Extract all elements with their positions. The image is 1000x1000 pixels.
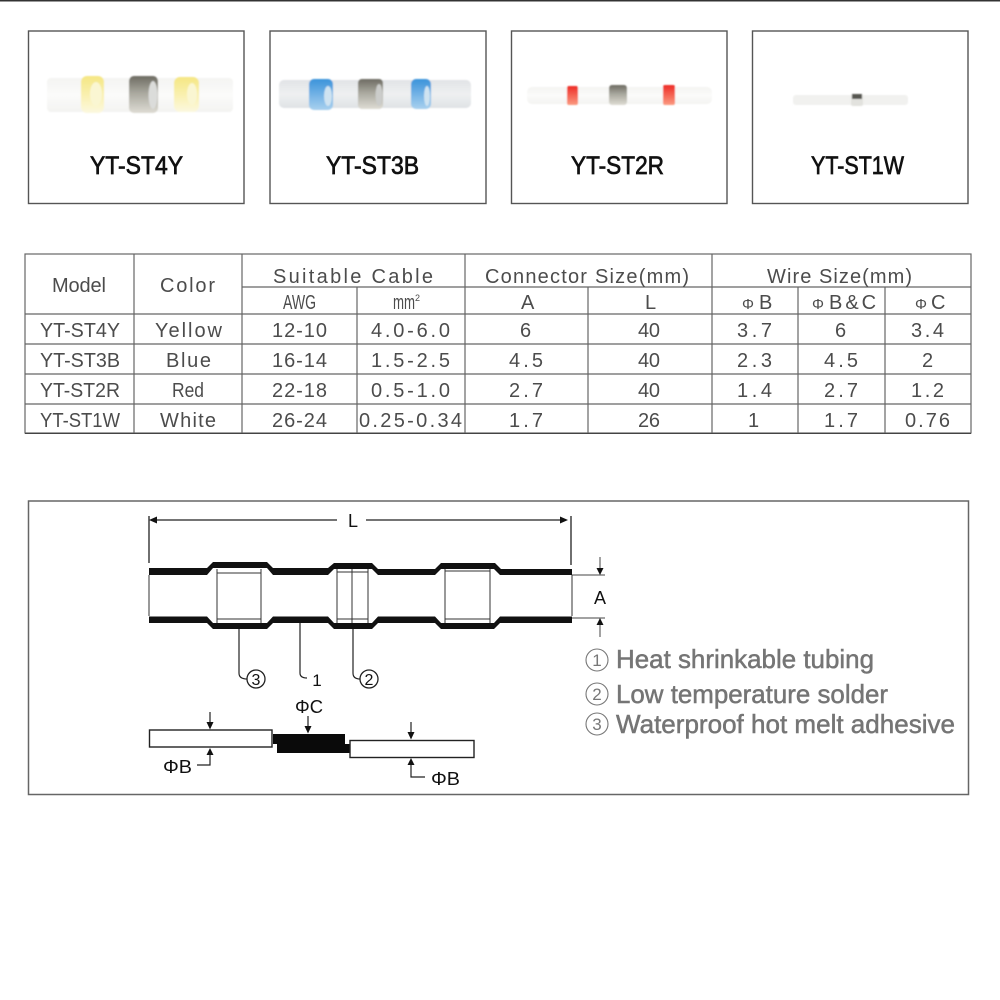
dimension A [572,557,606,637]
dimension A: A [594,588,606,608]
table row: YT-ST2R: 1.2 [911,380,944,402]
table row: YT-ST3B: 4.5 [509,350,543,372]
legend item 1: Heat shrinkable tubing [616,644,874,674]
table header: 2 [415,293,420,303]
legend item 3: 3 [592,715,602,734]
panel: connector diagram [28,501,968,794]
table row: YT-ST1W: 1.7 [824,410,858,432]
tube cross-section [149,562,572,629]
table row: YT-ST3B: 4.5 [824,350,858,372]
table row: YT-ST2R: 22-18 [272,380,327,402]
label: phi B right: ΦB [431,769,460,789]
specification table [25,254,971,434]
table row: YT-ST4Y: Yellow [155,320,223,342]
table row: YT-ST1W: 26 [638,410,660,432]
table row: YT-ST1W: 0.25-0.34 [359,410,462,432]
table row: YT-ST3B: 16-14 [272,350,327,372]
table row: YT-ST2R: 2.7 [509,380,543,402]
table row: YT-ST2R: YT-ST2R [40,380,120,402]
table header: ΦC [915,292,945,314]
photo: white connector [793,94,908,106]
table row: YT-ST3B [40,350,933,372]
panel: YT-ST3B product [270,31,486,204]
table header: A [521,292,535,314]
table header: ΦB [742,292,772,314]
table header: L [645,292,656,314]
table row: YT-ST3B: 40 [638,350,660,372]
callout 3 [239,629,265,689]
table row: YT-ST4Y: 6 [835,320,846,342]
table header: Suitable Cable [273,266,433,288]
legend item 1: 1 [592,651,602,670]
table row: YT-ST4Y: 4.0-6.0 [371,320,450,342]
table row: YT-ST4Y: 3.7 [737,320,772,342]
table row: YT-ST1W: White [160,410,216,432]
table row: YT-ST3B: 2.3 [737,350,772,372]
table row: YT-ST2R: 1.4 [737,380,772,402]
label: YT-ST2R: YT-ST2R [571,152,664,180]
callout 1: 1 [312,671,322,690]
legend item 2: Low temperature solder [616,679,888,709]
table row: YT-ST3B: 1.5-2.5 [371,350,450,372]
label: phi B left: ΦB [163,757,192,777]
table header: Model [52,275,106,297]
table row: YT-ST1W: 1 [748,410,759,432]
table row: YT-ST1W: YT-ST1W [40,410,120,432]
panel: YT-ST2R product [512,31,727,204]
table row: YT-ST1W: 1.7 [509,410,543,432]
table row: YT-ST1W: 26-24 [272,410,327,432]
wire diagram [150,697,474,789]
callout 1 [300,623,322,690]
table row: YT-ST4Y: 40 [638,320,660,342]
table row: YT-ST2R: Red [172,380,204,402]
photo: blue connector [279,79,471,110]
table row: YT-ST3B: Blue [166,350,211,372]
table row: YT-ST2R: 0.5-1.0 [371,380,450,402]
table row: YT-ST4Y: 12-10 [272,320,327,342]
table row: YT-ST4Y: YT-ST4Y [40,320,120,342]
table row: YT-ST2R: 2.7 [824,380,858,402]
label: phi C: ΦC [295,697,323,717]
table header: AWG [283,292,316,314]
table row: YT-ST4Y: 3.4 [911,320,944,342]
table row: YT-ST2R [40,380,944,402]
table row: YT-ST1W: 0.76 [905,410,950,432]
photo: red connector [527,85,712,105]
dimension L [149,511,571,565]
table row: YT-ST2R: 40 [638,380,660,402]
table header: Connector Size(mm) [485,266,689,288]
legend item 3: Waterproof hot melt adhesive [616,709,955,739]
table row: YT-ST4Y: 6 [520,320,531,342]
table header [52,266,945,314]
label: YT-ST3B: YT-ST3B [326,152,419,180]
legend item 2: 2 [592,685,602,704]
callout 3: 3 [252,672,261,689]
table header: Color [160,275,215,297]
panel: YT-ST4Y product [28,31,244,204]
table header: ΦB&C [812,292,876,314]
legend [586,644,955,739]
table row: YT-ST3B: YT-ST3B [40,350,120,372]
table header: Wire Size(mm) [767,266,912,288]
callout 2: 2 [365,672,374,689]
table header: mm [393,292,415,314]
table row: YT-ST4Y [40,320,944,342]
label: YT-ST1W: YT-ST1W [811,152,904,180]
photo: yellow connector [47,76,233,113]
table row: YT-ST3B: 2 [922,350,933,372]
callout 2 [353,629,378,689]
table row: YT-ST1W [40,410,950,432]
dimension L: L [348,511,358,531]
panel: YT-ST1W product [752,31,968,204]
label: YT-ST4Y: YT-ST4Y [90,152,183,180]
top edge line [0,0,1000,2]
